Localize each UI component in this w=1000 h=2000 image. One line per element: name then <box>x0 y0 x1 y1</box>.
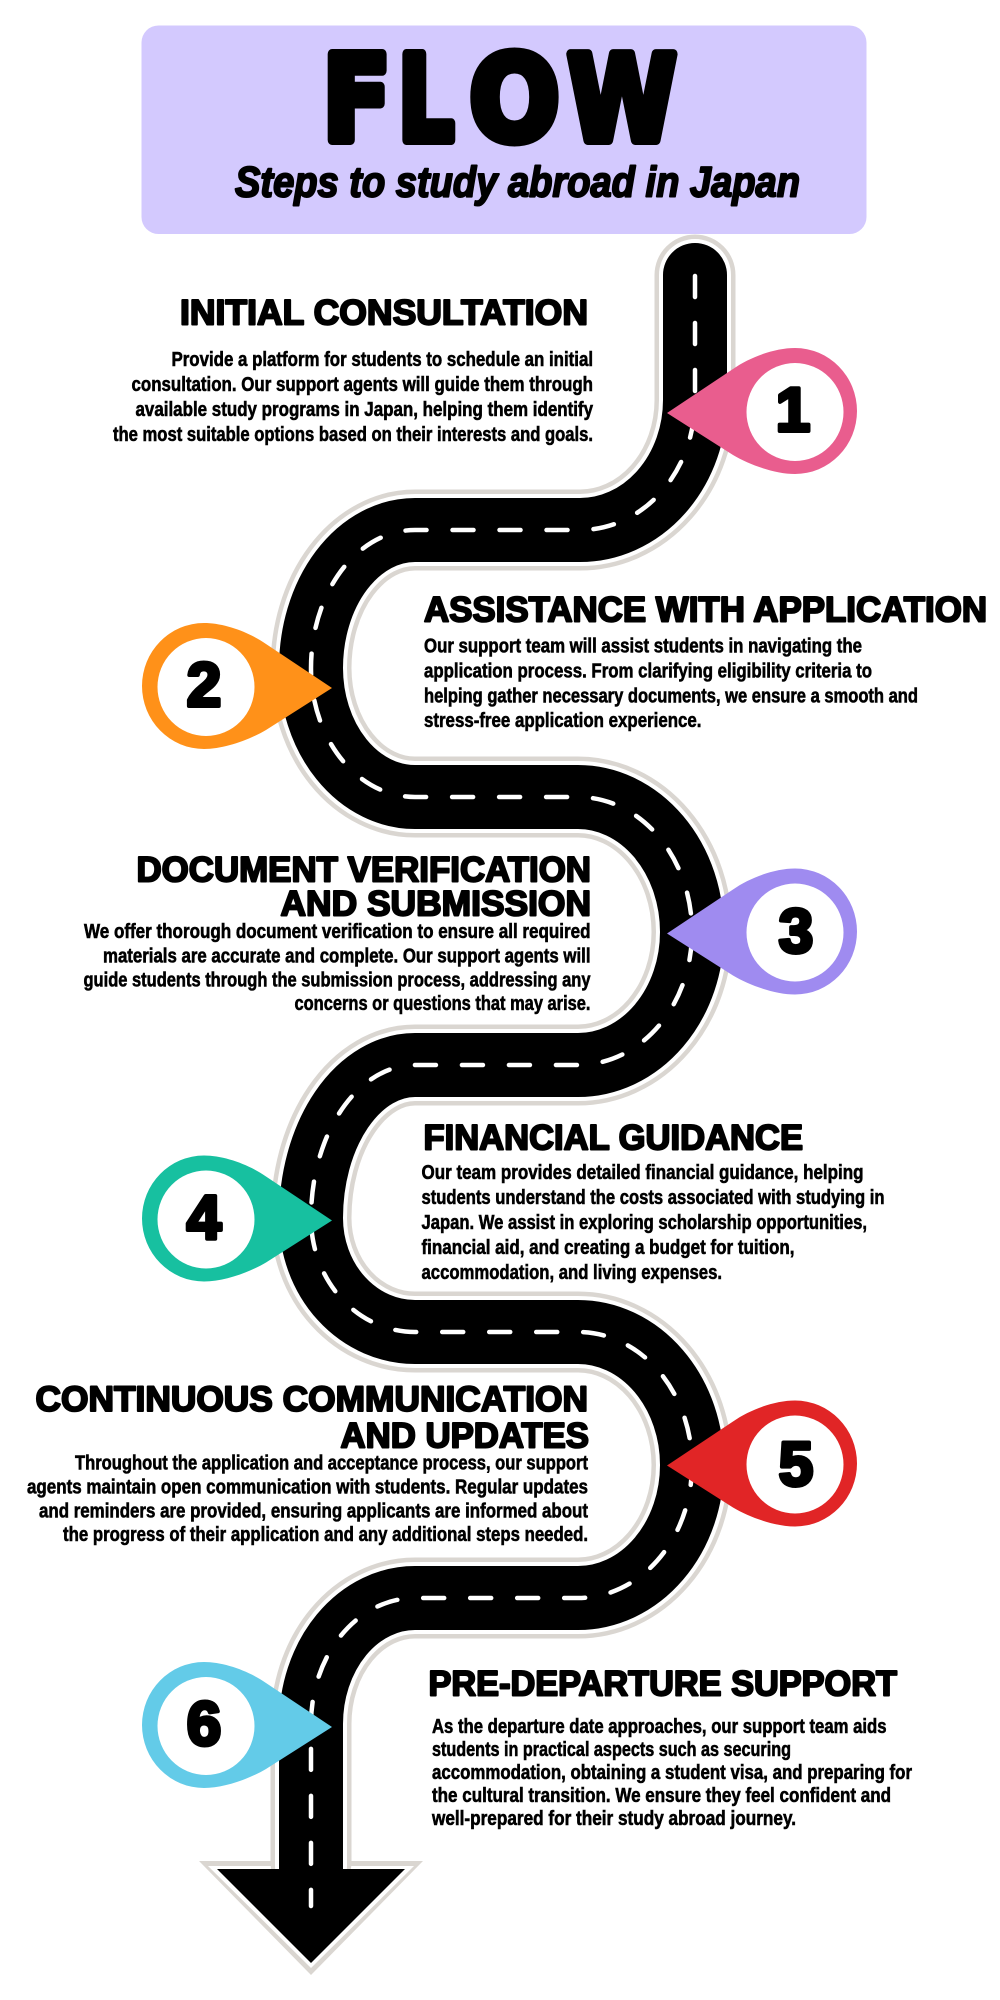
pin 4 <box>142 1156 332 1282</box>
title: FLOW: L <box>398 30 454 168</box>
description: application process. From clarifying eligibility criteria to <box>424 660 872 682</box>
heading: initial consultation: INITIAL CONSULTATION <box>180 294 588 332</box>
heading: continuous communication and updates <box>36 1380 589 1456</box>
pin 2 <box>142 623 332 749</box>
step 5 <box>27 1380 857 1546</box>
description: concerns or questions that may arise. <box>294 993 590 1015</box>
pin 5 <box>667 1400 857 1526</box>
pin 1: 1 <box>776 376 810 445</box>
pin 6 <box>142 1662 332 1788</box>
description: students understand the costs associated with studying in <box>422 1187 884 1209</box>
arrow head outline <box>199 1861 423 1975</box>
description: As the departure date approaches, our support team aids <box>432 1716 886 1738</box>
description <box>422 1162 884 1284</box>
description: financial aid, and creating a budget for tuition, <box>422 1237 794 1259</box>
heading: document verification and submission <box>136 850 591 924</box>
road centre dashes <box>311 276 695 1906</box>
description: Throughout the application and acceptance process, our support <box>75 1452 588 1474</box>
description: students in practical aspects such as securing <box>432 1739 791 1761</box>
heading: continuous communication and updates: AND UPDATES <box>340 1416 589 1456</box>
description: consultation. Our support agents will guide them through <box>132 374 593 396</box>
description: the most suitable options based on their interests and goals. <box>113 424 593 446</box>
step 3 <box>84 850 857 1015</box>
description: Japan. We assist in exploring scholarship opportunities, <box>422 1212 867 1234</box>
title: FLOW: W <box>568 30 676 168</box>
step 6 <box>142 1662 912 1830</box>
description: materials are accurate and complete. Our support agents will <box>103 946 590 968</box>
description: and reminders are provided, ensuring applicants are informed about <box>39 1500 588 1522</box>
description <box>424 636 918 732</box>
heading: document verification and submission: AND SUBMISSION <box>280 884 591 924</box>
step 2 <box>142 590 987 749</box>
title: FLOW: F <box>323 30 391 168</box>
pin 6: 6 <box>187 1690 221 1759</box>
road surface <box>311 275 695 1875</box>
subtitle: Steps to study abroad in Japan <box>235 158 800 206</box>
description <box>113 349 594 446</box>
pin 5: 5 <box>779 1430 813 1500</box>
description: accommodation, obtaining a student visa, and preparing for <box>432 1762 912 1784</box>
pin 4: 4 <box>187 1184 222 1252</box>
heading: continuous communication and updates: CONTINUOUS COMMUNICATION <box>36 1380 588 1419</box>
step 1 <box>113 294 857 474</box>
description: available study programs in Japan, helping them identify <box>136 399 594 421</box>
description: We offer thorough document verification to ensure all required <box>84 921 590 943</box>
description: Provide a platform for students to schedule an initial <box>172 349 593 371</box>
description: agents maintain open communication with students. Regular updates <box>27 1476 588 1498</box>
pin 1 <box>667 348 857 474</box>
winding road with arrow <box>199 275 695 1975</box>
title banner <box>142 26 866 234</box>
pin 3: 3 <box>779 898 813 966</box>
road shoulder <box>311 275 695 1866</box>
description: Our team provides detailed financial guidance, helping <box>422 1162 864 1184</box>
description: stress-free application experience. <box>424 710 702 732</box>
pin 2: 2 <box>187 651 221 720</box>
description <box>84 921 591 1015</box>
arrow head <box>217 1869 405 1963</box>
description: guide students through the submission process, addressing any <box>84 970 591 992</box>
title: FLOW: O <box>470 30 560 168</box>
description: the cultural transition. We ensure they feel confident and <box>432 1785 891 1807</box>
description <box>27 1452 588 1546</box>
description: well-prepared for their study abroad journey. <box>431 1808 796 1830</box>
heading: assistance with application: ASSISTANCE WITH APPLICATION <box>424 590 987 630</box>
description: accommodation, and living expenses. <box>422 1262 722 1284</box>
description: Our support team will assist students in navigating the <box>424 636 862 658</box>
heading: financial guidance: FINANCIAL GUIDANCE <box>424 1118 803 1158</box>
banner background <box>142 26 866 234</box>
description <box>431 1716 912 1830</box>
arrow head gap <box>208 1866 414 1968</box>
heading: pre-departure support: PRE-DEPARTURE SUPPORT <box>428 1664 897 1704</box>
pin 3 <box>667 868 857 994</box>
step 4 <box>142 1118 884 1284</box>
heading: document verification and submission: DOCUMENT VERIFICATION <box>136 850 591 890</box>
road edge <box>311 275 695 1862</box>
description: the progress of their application and any additional steps needed. <box>63 1524 588 1546</box>
